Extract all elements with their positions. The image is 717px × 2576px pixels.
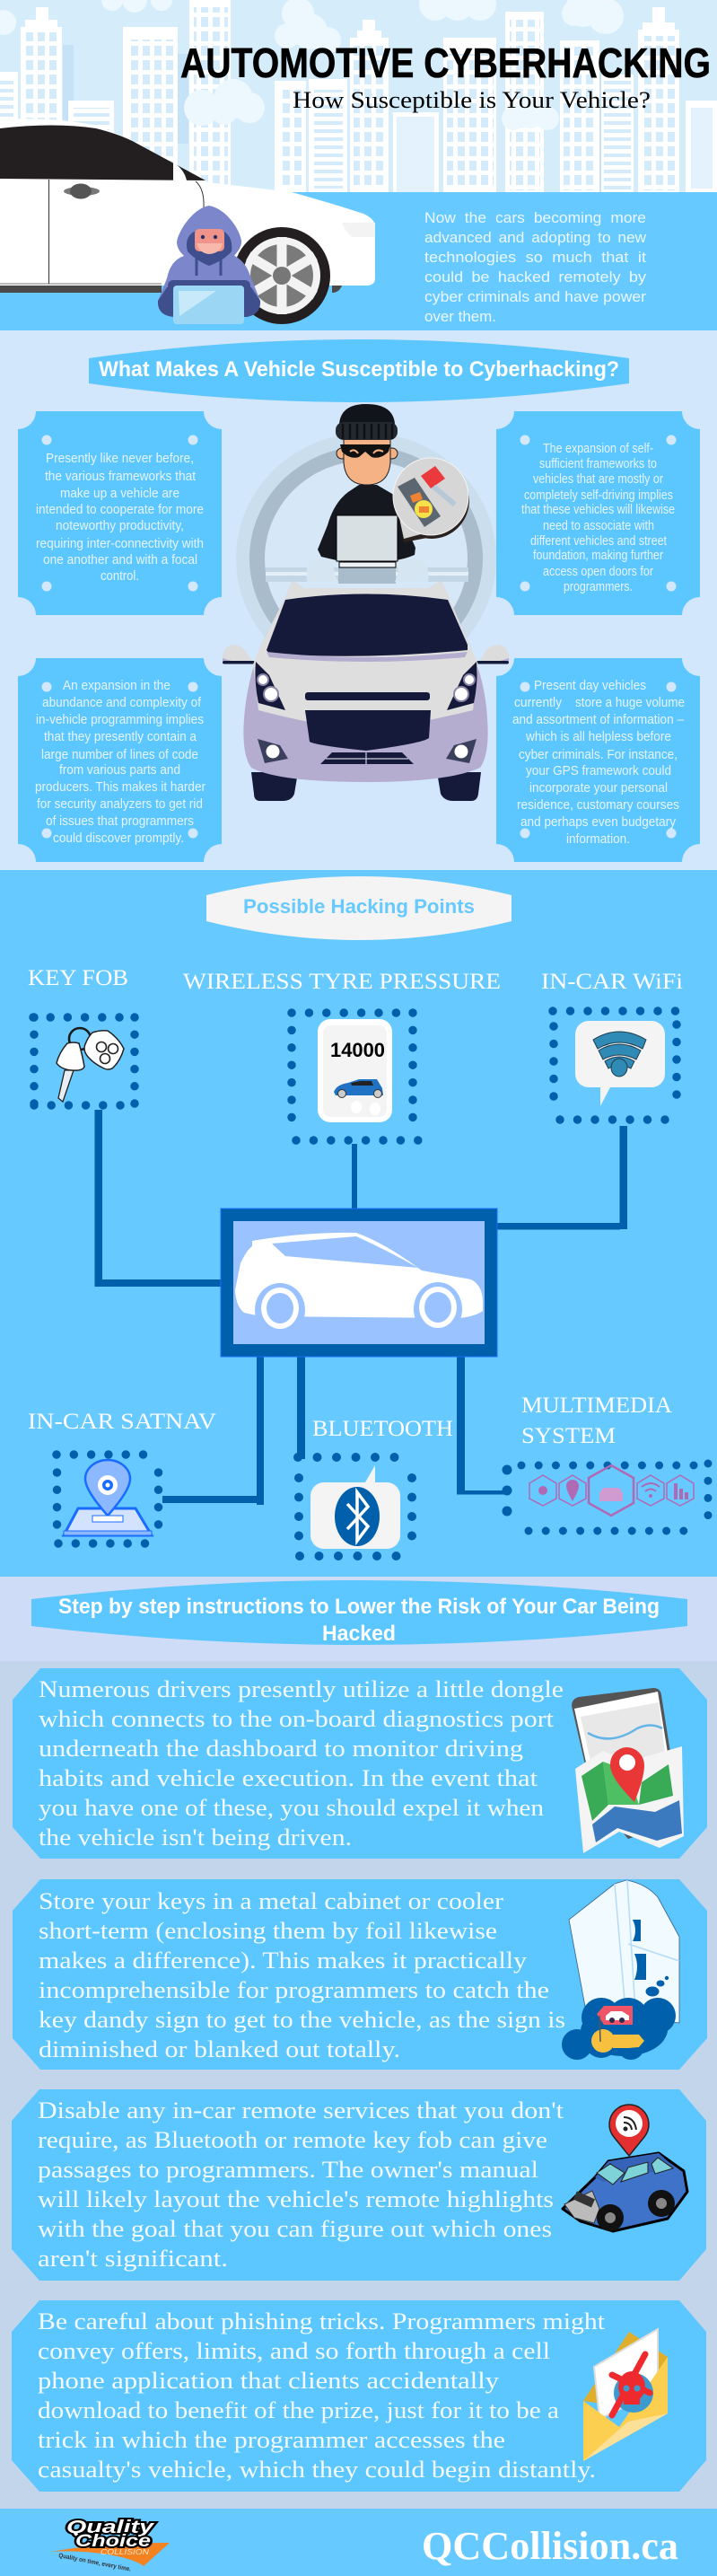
panel: frameworks cooperate [18, 411, 222, 615]
section background: hacking points [0, 870, 717, 1577]
panel: phishing tip: trick in which the programmer accesses the [38, 2427, 505, 2453]
panel: self-sufficient frameworks: different vehicles and street [530, 533, 668, 549]
panel: keys in metal cabinet tip: Store your keys in a metal cabinet or cooler [39, 1888, 503, 1914]
intro paragraph: Now the cars becoming more [424, 209, 646, 226]
panel: in-vehicle programming: in-vehicle programming implies [36, 712, 204, 727]
panel: in-vehicle programming [18, 658, 222, 862]
icon: car with wifi pin [563, 2105, 687, 2231]
icon: bluetooth bubble in dotted frame [298, 1457, 413, 1556]
section background: lower risk heading [0, 1577, 717, 1661]
panel: data volume: Present day vehicles [534, 678, 646, 693]
icon: fridge and key cloud [562, 1880, 679, 2060]
panel: in-vehicle programming: that they presently contain a [44, 729, 197, 744]
panel: data volume [496, 658, 700, 862]
panel: phishing tip: download to benefit of the prize, just for it to be a [38, 2397, 560, 2423]
panel: phishing tip: Be careful about phishing tricks. Programmers might [38, 2308, 606, 2334]
panel: dongle tip: you have one of these, you should expel it when [39, 1795, 544, 1821]
icon: tyre pressure phone in dotted frame [292, 1013, 419, 1140]
icon: satnav pin in dotted frame [57, 1455, 161, 1543]
label: multimedia system: SYSTEM [521, 1424, 616, 1448]
panel: in-vehicle programming: large number of lines of code [41, 747, 198, 762]
panel: keys in metal cabinet tip: short-term (enclosing them by foil likewise [39, 1918, 497, 1944]
panel: in-vehicle programming: for security analyzers to get rid [37, 796, 203, 812]
heading banner: what makes a vehicle susceptible [89, 339, 629, 402]
intro paragraph [424, 209, 647, 325]
panel: dongle tip: Numerous drivers presently utilize a little dongle [39, 1676, 564, 1702]
panel: in-vehicle programming: An expansion in the [63, 678, 171, 693]
heading banner: step by step instructions: Step by step instructions to Lower the Risk of Your Car Being [58, 1595, 660, 1619]
panel: frameworks cooperate: make up a vehicle are [60, 486, 179, 501]
icon: wifi bubble in dotted frame [553, 1011, 682, 1120]
panel: in-vehicle programming: producers. This makes it harder [35, 779, 205, 795]
panel: data volume: and perhaps even budgetary [520, 814, 676, 830]
icon: envelope with skull [583, 2329, 668, 2461]
intro paragraph: technologies so much that it [424, 249, 646, 266]
panel: self-sufficient frameworks: foundation, making further [533, 548, 663, 563]
panel: in-vehicle programming: from various parts and [59, 762, 180, 778]
icon: multimedia hexagons in dotted frame [507, 1464, 708, 1532]
panel: in-vehicle programming: could discover promptly. [53, 831, 184, 846]
panel: self-sufficient frameworks: need to associate with [543, 518, 654, 533]
panel: disable remote services tip: with the goal that you can figure out which ones [38, 2216, 552, 2242]
panel: keys in metal cabinet tip: diminished or blanked out totally. [39, 2036, 400, 2062]
intro paragraph: cyber criminals and have power [424, 288, 646, 305]
heading banner: what makes a vehicle susceptible: What Makes A Vehicle Susceptible to Cyberhacking? [99, 357, 619, 382]
panel: self-sufficient frameworks: programmers. [564, 579, 633, 594]
panel: phishing tip [12, 2300, 706, 2492]
section background: tips [0, 1661, 717, 2509]
logo: quality choice collision: Quality on time, every time. [58, 2553, 131, 2573]
panel: keys in metal cabinet tip [13, 1879, 707, 2070]
panel: in-vehicle programming: abundance and complexity of [42, 695, 202, 710]
hero skyline background [0, 0, 717, 198]
section background: what makes a vehicle susceptible [0, 330, 717, 870]
panel: self-sufficient frameworks: access open doors for [543, 564, 653, 579]
panel: phishing tip: casualty's vehicle, which they could begin distantly. [38, 2457, 596, 2483]
panel: data volume: information. [566, 831, 630, 847]
panel: self-sufficient frameworks: that these vehicles will likewise [521, 502, 675, 517]
subtitle: How Susceptible is Your Vehicle? [293, 87, 651, 113]
panel: frameworks cooperate: control. [101, 568, 139, 584]
panel: self-sufficient frameworks: completely self-driving implies [524, 488, 673, 503]
panel: data volume: your GPS framework could [526, 763, 671, 778]
icon: tyre pressure phone in dotted frame: 14000 [330, 1039, 385, 1061]
label: in-car wifi: IN-CAR WiFi [541, 970, 683, 994]
front car [223, 581, 509, 801]
panel: disable remote services tip [12, 2089, 706, 2281]
panel: self-sufficient frameworks: sufficient frameworks to [539, 456, 657, 471]
panel: frameworks cooperate: the various frameworks that [45, 469, 197, 484]
panel: data volume: incorporate your personal [529, 780, 668, 796]
logo: quality choice collision [51, 2518, 170, 2573]
panel: frameworks cooperate: noteworthy productivity, [56, 518, 184, 533]
panel: dongle tip: the vehicle isn't being driven. [39, 1824, 352, 1851]
intro paragraph: could be hacked remotely by [424, 268, 647, 286]
heading banner: step by step instructions: Hacked [322, 1622, 396, 1646]
logo: quality choice collision: Quality [66, 2518, 154, 2537]
panel: disable remote services tip: aren't significant. [38, 2246, 228, 2272]
ring [236, 433, 496, 684]
icon: phone and map [572, 1688, 684, 1853]
panel: self-sufficient frameworks: The expansion of self- [543, 441, 653, 456]
website url: QCCollision.ca [422, 2524, 678, 2568]
panel: frameworks cooperate: one another and with a focal [43, 552, 197, 567]
label: wireless tyre pressure: WIRELESS TYRE PRESSURE [183, 970, 501, 994]
panel: data volume: cyber criminals. For instance, [519, 747, 678, 762]
panel: frameworks cooperate: Presently like never before, [46, 451, 194, 466]
icon: key fob in dotted frame [33, 1017, 136, 1105]
panel: data volume: which is all helpless before [525, 729, 671, 744]
panel: in-vehicle programming: of issues that programmers [46, 813, 194, 829]
panel: dongle tip [13, 1668, 707, 1859]
panel: dongle tip: underneath the dashboard to monitor driving [39, 1736, 523, 1762]
panel: data volume: currently [514, 695, 562, 710]
hacker with laptop [158, 206, 260, 324]
intro paragraph: advanced and adopting to new [424, 229, 647, 246]
logo: quality choice collision: COLLISION [101, 2548, 149, 2556]
panel: data volume: and assortment of information – [512, 712, 685, 727]
hero car with wheel [0, 119, 375, 324]
burglar [318, 404, 415, 567]
panel: phishing tip: convey offers, limits, and so forth through a cell [38, 2338, 550, 2364]
heading banner: possible hacking points: Possible Hacking Points [243, 895, 475, 918]
panel: frameworks cooperate: intended to cooperate for more [36, 502, 204, 517]
label: in-car satnav: IN-CAR SATNAV [28, 1410, 216, 1434]
blue intro band [0, 192, 717, 330]
panel: dongle tip: which connects to the on-board diagnostics port [39, 1706, 555, 1732]
panel: keys in metal cabinet tip: incomprehensible for programmers to catch the [39, 1977, 549, 2003]
panel: disable remote services tip: Disable any in-car remote services that you don't [38, 2097, 564, 2123]
connector lines [95, 1110, 627, 1505]
panel: data volume: store a huge volume [575, 695, 685, 710]
central illustration: hacker on car [223, 404, 509, 801]
intro paragraph: over them. [424, 308, 496, 325]
footer band [0, 2509, 717, 2576]
clouds [0, 0, 624, 130]
label: multimedia system [521, 1394, 672, 1448]
panel: disable remote services tip: require, as Bluetooth or remote key fob can give [38, 2127, 547, 2153]
panel: keys in metal cabinet tip: key dandy sign to get to the vehicle, as the sign is [39, 2007, 565, 2033]
label: bluetooth: BLUETOOTH [312, 1417, 453, 1441]
logo: quality choice collision: Choice [75, 2532, 152, 2551]
panel: disable remote services tip: will likely layout the vehicle's remote highlights [38, 2186, 554, 2212]
panel: phishing tip: phone application that clients accidentally [38, 2368, 499, 2394]
panel: self-sufficient frameworks [496, 411, 700, 615]
heading banner: possible hacking points [206, 876, 512, 940]
panel: keys in metal cabinet tip: makes a difference). This makes it practically [39, 1947, 527, 1974]
panel: data volume: residence, customary courses [517, 797, 679, 813]
label: multimedia system: MULTIMEDIA [521, 1394, 672, 1418]
panel: frameworks cooperate: requiring inter-connectivity with [36, 536, 204, 551]
label: key fob: KEY FOB [28, 966, 128, 990]
panel: dongle tip: habits and vehicle execution. In the event that [39, 1765, 538, 1791]
panel: disable remote services tip: passages to programmers. The owner's manual [38, 2157, 538, 2183]
central car screen [221, 1209, 497, 1357]
key bubble [393, 458, 469, 542]
heading banner: step by step instructions [31, 1580, 687, 1646]
panel: self-sufficient frameworks: vehicles that are mostly or [533, 471, 663, 487]
